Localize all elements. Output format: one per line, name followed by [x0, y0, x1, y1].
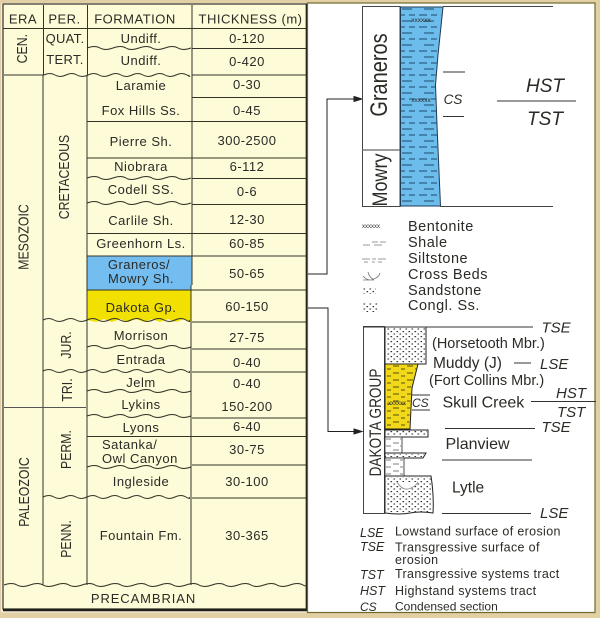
thickness values: 60-85 — [229, 236, 265, 251]
formation names: Entrada — [116, 352, 166, 367]
legend: lithology: Congl. Ss. — [408, 298, 480, 314]
thickness values: 0-40 — [233, 355, 261, 370]
connector arrow: Graneros — [308, 96, 362, 274]
legend: abbreviations: Lowstand surface of erosion — [395, 524, 561, 538]
legend: lithology — [362, 219, 488, 314]
highlighted Dakota cell — [87, 290, 191, 322]
panel: Dakota Group column: Skull Creek — [442, 394, 525, 412]
formation names: Lyons — [123, 420, 159, 435]
unconformity wavy lines — [87, 46, 191, 50]
thickness values: 0-40 — [233, 376, 261, 391]
table headers: ERA — [9, 12, 37, 26]
legend: abbreviations: Condensed section — [395, 600, 498, 614]
formation names: Morrison — [114, 328, 168, 343]
grid lines — [3, 5, 316, 586]
thickness values: 6-112 — [230, 159, 264, 174]
formation names: Mowry Sh. — [108, 271, 174, 286]
column labels: Graneros — [365, 33, 392, 117]
connector arrow: Dakota — [308, 308, 362, 434]
formation names: Jelm — [126, 375, 156, 390]
panel: Dakota Group column: (Horsetooth Mbr.) — [432, 336, 545, 352]
panel: Graneros Mowry column: TST — [527, 109, 564, 130]
panel: Graneros Mowry column: CS — [444, 92, 462, 107]
thickness values: 30-75 — [229, 442, 265, 457]
panel: Dakota Group column: TST — [557, 404, 587, 421]
bentonite mark: xxxxxx — [388, 401, 406, 407]
table headers — [9, 12, 302, 26]
period labels: CRETACEOUS — [56, 135, 72, 219]
panel: Dakota Group column: Lytle — [452, 480, 484, 496]
legend: lithology: Sandstone — [408, 283, 482, 299]
legend: abbreviations: LSE — [360, 526, 384, 540]
panel: Graneros Mowry column: HST — [526, 76, 565, 97]
formation names: Undiff. — [121, 31, 161, 46]
panel: Dakota Group column: Muddy (J) — [433, 355, 502, 372]
thickness values: 0-6 — [237, 184, 257, 199]
era labels — [14, 34, 32, 527]
thickness values: 30-100 — [225, 474, 269, 489]
legend: abbreviations: HST — [360, 584, 386, 598]
thickness values: 0-30 — [233, 77, 261, 92]
era labels: MESOZOIC — [15, 204, 32, 270]
thickness values: 150-200 — [221, 399, 273, 414]
thickness values: 6-40 — [233, 419, 261, 434]
thickness values: 0-45 — [233, 103, 261, 118]
panel: Dakota Group column — [363, 320, 596, 522]
thickness values: 60-150 — [225, 299, 269, 314]
formation names: Undiff. — [121, 53, 161, 68]
panel: Dakota Group column: HST — [556, 385, 588, 402]
thickness values: 50-65 — [229, 266, 265, 281]
formation names: Pierre Sh. — [110, 134, 172, 149]
era labels: CEN. — [14, 34, 30, 63]
formation names — [96, 31, 186, 543]
panel: right white background — [308, 3, 595, 612]
legend: abbreviations: Transgressive systems tract — [395, 567, 560, 581]
period labels: TERT. — [46, 52, 84, 67]
formation names: Greenhorn Ls. — [96, 236, 186, 251]
table headers: THICKNESS (m) — [198, 12, 302, 26]
thickness values: 27-75 — [229, 330, 265, 345]
formation names: Fox Hills Ss. — [102, 103, 180, 118]
period labels: TRI. — [59, 378, 75, 402]
thickness values: 30-365 — [225, 528, 269, 543]
formation names: Owl Canyon — [102, 451, 178, 466]
formation names: Lykins — [121, 397, 161, 412]
legend: lithology: Siltstone — [408, 251, 468, 267]
surface lines — [363, 327, 596, 514]
formation names: Satanka/ — [102, 437, 157, 452]
panel: Dakota Group column: Planview — [446, 436, 510, 453]
period labels: PENN. — [58, 520, 74, 558]
formation names: Ingleside — [113, 474, 169, 489]
panel: Dakota Group column: LSE — [540, 356, 569, 373]
highlighted Graneros/Mowry cell — [87, 256, 192, 290]
legend: abbreviations: CS — [360, 600, 377, 614]
period labels: JUR. — [58, 331, 74, 359]
period labels: PERM. — [58, 430, 74, 469]
panel: Graneros Mowry column — [362, 6, 576, 206]
bentonite marks: xxxxxx — [411, 17, 432, 24]
legend: lithology: Bentonite — [408, 219, 474, 235]
formation names: Laramie — [116, 78, 166, 93]
legend: abbreviations — [360, 524, 561, 614]
Dakota labels: DAKOTA GROUP — [367, 369, 385, 476]
period labels: QUAT. — [46, 31, 84, 46]
panel: Graneros Mowry column: Mowry — [369, 153, 392, 206]
panel: stratigraphic table — [1, 3, 316, 612]
panel: Dakota Group column: (Fort Collins Mbr.) — [429, 373, 544, 389]
panel: Graneros Mowry column: xxxxxx — [411, 97, 432, 104]
table headers: FORMATION — [94, 12, 176, 26]
Lytle sandstone — [385, 476, 433, 514]
formation names: Niobrara — [114, 159, 168, 174]
table headers: PER. — [48, 12, 81, 26]
formation names: Dakota Gp. — [106, 300, 176, 315]
sandstone ledge — [385, 430, 428, 437]
period labels — [46, 31, 84, 558]
thickness values: 0-420 — [229, 54, 265, 69]
era labels: PALEOZOIC — [16, 457, 32, 527]
shale fill — [400, 7, 443, 206]
legend: abbreviations: erosion — [395, 553, 438, 567]
panel: Dakota Group column: TSE — [542, 419, 572, 436]
thickness values: 300-2500 — [218, 133, 276, 148]
precambrian label: PRECAMBRIAN — [91, 591, 196, 606]
Planview shale — [385, 437, 402, 453]
formation names: Carlile Sh. — [108, 213, 174, 228]
legend: lithology: Shale — [408, 235, 448, 251]
formation names: Codell SS. — [108, 182, 174, 197]
Fort Collins yellow unit — [385, 364, 418, 429]
formation names: Graneros/ — [108, 257, 170, 272]
thickness values: 12-30 — [229, 212, 265, 227]
formation names: Fountain Fm. — [100, 528, 182, 543]
panel: Dakota Group column: LSE — [540, 505, 569, 522]
legend: abbreviations: Transgressive surface of — [395, 540, 540, 554]
panel: Dakota Group column: TSE — [542, 320, 572, 336]
legend symbols: xxxxxx — [362, 224, 380, 230]
thickness values — [218, 31, 276, 543]
legend: abbreviations: TST — [360, 568, 385, 582]
legend: abbreviations: Highstand systems tract — [395, 584, 537, 598]
legend: abbreviations: TSE — [360, 540, 385, 554]
Horsetooth sandstone — [385, 327, 426, 364]
legend: lithology: Cross Beds — [408, 267, 488, 283]
panel: Dakota Group column: CS — [412, 396, 429, 410]
thickness values: 0-120 — [229, 31, 265, 46]
